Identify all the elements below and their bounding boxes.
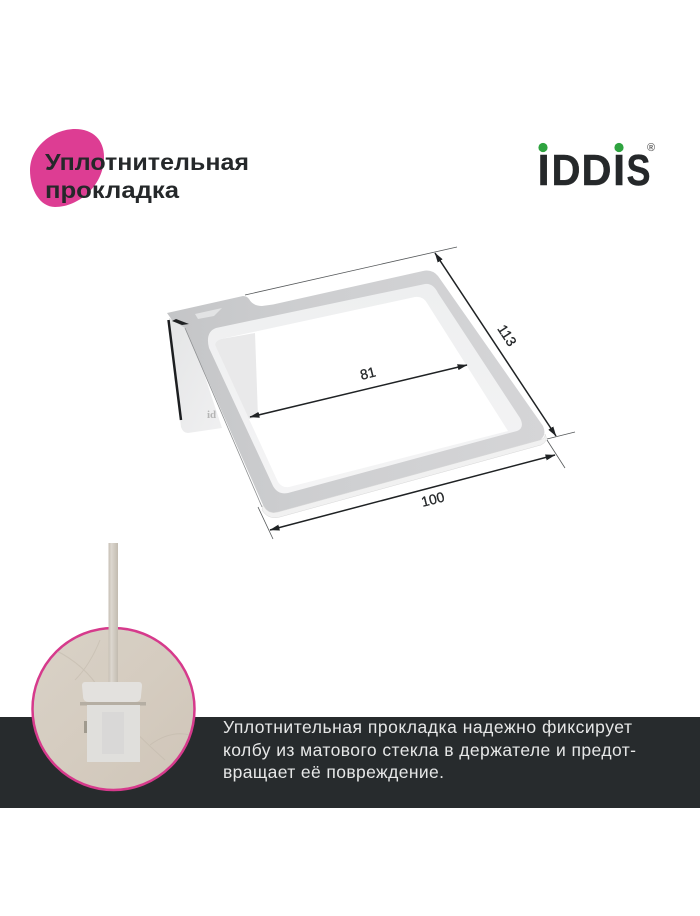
- logo: IDDIS: ®: [647, 142, 655, 154]
- label 113: 113: [494, 322, 520, 349]
- logo: IDDIS: [538, 142, 655, 195]
- photo circle: installed product: [32, 543, 194, 790]
- bracket: [80, 702, 146, 706]
- icon: wall plate logo fragment: id: [207, 409, 216, 421]
- glass body: [87, 705, 140, 762]
- plate lower edge: [262, 434, 546, 518]
- wall plate behind opening: [215, 333, 258, 419]
- dimension lines: [245, 247, 575, 539]
- description text: колбу из матового стекла в держателе и предот-: [223, 740, 636, 760]
- label 81: 81: [358, 363, 377, 383]
- product: toilet brush holder plate: [167, 271, 546, 518]
- dark band: [0, 717, 700, 808]
- dimension 113: [435, 253, 556, 436]
- dimension 100: [270, 455, 555, 530]
- glass rim: [82, 682, 142, 702]
- description text: Уплотнительная прокладка надежно фиксирует: [223, 717, 632, 737]
- title: Уплотнительная: [45, 149, 249, 175]
- pink blob: [30, 129, 104, 207]
- seal ring: [208, 284, 522, 493]
- wall plate: [169, 318, 222, 433]
- label 100: 100: [420, 489, 446, 510]
- title: прокладка: [45, 177, 180, 203]
- logo: IDDIS: S: [626, 146, 650, 195]
- description text: вращает её повреждение.: [223, 762, 444, 782]
- metal plate: [167, 271, 544, 513]
- opening: [215, 297, 508, 487]
- logo: IDDIS: I: [613, 146, 625, 195]
- logo: IDDIS: D: [582, 146, 612, 195]
- logo: IDDIS: I: [538, 146, 550, 195]
- brush handle: [108, 543, 118, 685]
- dimension 81: [250, 365, 467, 417]
- logo: IDDIS: D: [552, 146, 580, 195]
